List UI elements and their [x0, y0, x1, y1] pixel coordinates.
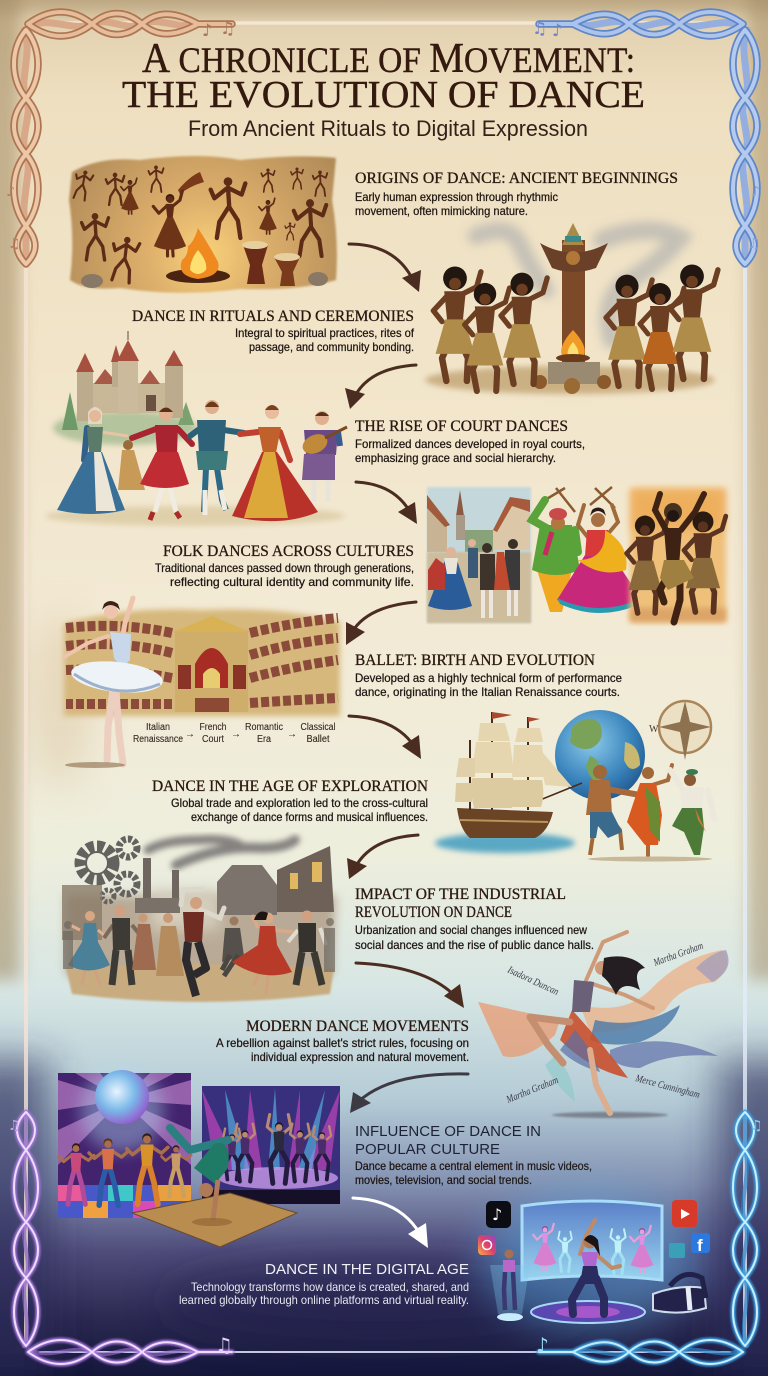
heading: popular culture: Dance became a central element in music videos, — [355, 1159, 592, 1173]
icon: vr headset — [653, 1274, 706, 1313]
bottom-left braid — [14, 1112, 232, 1364]
arrow 3 — [356, 482, 417, 524]
woman in red — [232, 912, 294, 995]
heading: court: Formalized dances developed in royal courts, — [355, 437, 585, 451]
man with waistcoat — [104, 906, 140, 985]
heading: rituals: DANCE IN RITUALS AND CEREMONIES — [132, 308, 414, 325]
holographic platform — [531, 1301, 645, 1323]
handwritten names — [504, 941, 705, 1106]
campfire — [166, 228, 230, 283]
timeline: → — [287, 729, 297, 740]
smoke — [476, 230, 680, 340]
background silhouettes — [63, 918, 335, 972]
arrow 1 — [349, 244, 421, 292]
heading: modern: individual expression and natural movement. — [251, 1050, 469, 1064]
dancer: woman in orange sari — [627, 765, 672, 858]
timeline: French — [200, 722, 226, 733]
city buildings — [62, 846, 334, 940]
disco floor — [58, 1185, 191, 1218]
arrow 6 — [347, 835, 418, 879]
timeline — [133, 722, 336, 745]
heading: popular culture: POPULAR CULTURE — [355, 1141, 500, 1158]
illustration: castle and court dancers — [45, 331, 347, 526]
dancer figure — [530, 932, 653, 1113]
icon: tiktok — [486, 1201, 511, 1228]
handwritten names: Martha Graham — [652, 941, 705, 969]
heading: folk: reflecting cultural identity and community life. — [170, 575, 414, 589]
illustration: ritual dance — [425, 223, 718, 394]
couples — [63, 889, 335, 996]
women in background — [132, 913, 184, 976]
compass: W — [649, 724, 659, 735]
heading: digital age: Technology transforms how dance is created, shared, and — [191, 1280, 469, 1294]
icon: facebook: f — [697, 1236, 703, 1255]
globe — [555, 710, 645, 800]
timeline: Romantic — [245, 722, 283, 733]
music notes: ♫ — [220, 19, 235, 39]
icon: instagram — [478, 1235, 496, 1255]
small hologram — [490, 1250, 530, 1321]
small background figure — [118, 440, 145, 490]
heading: exploration: Global trade and exploration led to the cross-cultural — [171, 796, 428, 810]
gown dancer red and gold — [232, 405, 318, 521]
dancer: man in green trousers — [670, 769, 714, 855]
music notes: ♫ — [8, 1118, 21, 1134]
heading: rituals — [132, 308, 415, 354]
breakdancer — [170, 1128, 232, 1226]
icon: tiktok: ♪ — [492, 1205, 502, 1224]
heading: digital age — [179, 1261, 469, 1307]
breakdance floor — [132, 1193, 297, 1247]
rocks — [81, 272, 328, 288]
panel: tribal dancers — [627, 488, 726, 622]
dandiya sticks — [540, 487, 615, 512]
gown dancer blue — [57, 407, 128, 514]
dance floor — [66, 964, 334, 1002]
heading: origins: Early human expression through rhythmic — [355, 190, 558, 204]
heading: origins: ORIGINS OF DANCE: ANCIENT BEGINNINGS — [355, 170, 678, 187]
arrow 2 — [345, 365, 416, 409]
music notes: ♪ — [536, 1333, 549, 1357]
totem pole — [533, 223, 611, 394]
bottom-right braid — [539, 1112, 757, 1364]
dancer: man in blue breeches — [586, 765, 640, 855]
music notes: ♪ — [751, 184, 760, 200]
illustration: industrial revolution — [62, 839, 336, 1002]
flowing fabric — [478, 950, 729, 1102]
heading: modern: A rebellion against ballet's strict rules, focusing on — [216, 1036, 469, 1050]
illustration: cave painting — [69, 156, 337, 293]
heading: folk — [155, 543, 414, 589]
heading: origins: movement, often mimicking nature. — [355, 204, 528, 218]
central man — [181, 889, 224, 996]
man on right — [288, 910, 326, 985]
heading: popular culture: INFLUENCE OF DANCE IN — [355, 1123, 541, 1140]
timeline: Renaissance — [133, 734, 183, 745]
music notes: ♫ — [748, 236, 761, 252]
panel: european village — [427, 487, 531, 623]
dancer red — [132, 407, 192, 520]
heading: folk: Traditional dances passed down through generations, — [155, 561, 414, 575]
music notes: ♫ — [532, 19, 547, 39]
hill and trees — [53, 392, 197, 445]
heading: industrial: REVOLUTION ON DANCE — [355, 904, 512, 921]
male dancer — [532, 500, 580, 612]
icon: shared video tile — [669, 1243, 685, 1258]
heading: court — [355, 418, 585, 465]
title — [122, 36, 645, 116]
drums — [242, 241, 300, 286]
timeline: Italian — [146, 722, 170, 733]
subtitle: From Ancient Rituals to Digital Expression — [188, 116, 588, 141]
music notes: ♪ — [6, 184, 15, 200]
cave figures — [71, 166, 327, 284]
heading: ballet: dance, originating in the Italian Renaissance courts. — [355, 685, 620, 699]
sea — [435, 833, 575, 853]
panel: disco — [58, 1068, 191, 1218]
heading: digital age: DANCE IN THE DIGITAL AGE — [265, 1261, 469, 1278]
heading: digital age: learned globally through online platforms and virtual reality. — [179, 1293, 469, 1307]
compass — [649, 701, 711, 760]
icon: youtube — [672, 1200, 697, 1227]
lute player — [299, 411, 347, 502]
heading: rituals: Integral to spiritual practices, rites of — [235, 326, 415, 340]
heading: exploration — [152, 778, 428, 824]
music notes: ♫ — [8, 236, 21, 252]
heading: industrial: IMPACT OF THE INDUSTRIAL — [355, 886, 566, 903]
arrow 9 — [353, 1198, 428, 1248]
heading: popular culture: movies, television, and social trends. — [355, 1173, 532, 1187]
title: A CHRONICLE OF MOVEMENT: — [142, 36, 635, 82]
timeline: Era — [257, 734, 271, 745]
heading: modern — [216, 1018, 469, 1064]
heading: origins — [355, 170, 678, 218]
ballerina — [64, 598, 164, 768]
music notes: ♫ — [215, 1333, 233, 1357]
woman in blue — [68, 911, 110, 985]
top-right braid — [539, 12, 757, 264]
factory — [135, 858, 277, 915]
icon: facebook — [691, 1233, 710, 1255]
timeline: Ballet — [306, 734, 330, 745]
heading: exploration: exchange of dance forms and musical influences. — [191, 810, 428, 824]
panel: south asian dancers — [532, 487, 642, 613]
heading: court: emphasizing grace and social hierarchy. — [355, 451, 556, 465]
heading: ballet — [355, 652, 622, 699]
handwritten names: Martha Graham — [504, 1075, 560, 1106]
heading: exploration: DANCE IN THE AGE OF EXPLORATION — [152, 778, 428, 795]
title: THE EVOLUTION OF DANCE — [122, 74, 645, 116]
timeline: → — [185, 729, 195, 740]
music notes: ♪ — [202, 21, 213, 41]
main dancer — [572, 1220, 620, 1314]
gears — [80, 839, 137, 902]
heading: rituals: passage, and community bonding. — [249, 340, 414, 354]
heading: ballet: Developed as a highly technical form of performance — [355, 671, 622, 685]
man in back — [222, 916, 244, 976]
illustration: ballet theatre — [64, 598, 340, 768]
illustration: digital age — [478, 1190, 710, 1330]
arrow 7 — [356, 963, 464, 1008]
opera house — [64, 609, 340, 716]
heading: modern: MODERN DANCE MOVEMENTS — [246, 1018, 469, 1035]
sailing ship — [455, 712, 582, 838]
timeline: Classical — [300, 722, 336, 733]
heading: ballet: BALLET: BIRTH AND EVOLUTION — [355, 652, 595, 669]
dancer blue — [190, 400, 244, 515]
heading: industrial: Urbanization and social changes influenced new — [355, 923, 587, 937]
arrow 5 — [349, 716, 421, 759]
handwritten names: Isadora Duncan — [505, 964, 560, 998]
music notes: ♫ — [750, 1118, 763, 1134]
heading: industrial — [355, 886, 594, 952]
ritual dancers — [433, 264, 718, 391]
village dancers — [428, 539, 520, 618]
timeline: → — [231, 729, 241, 740]
heading: folk: FOLK DANCES ACROSS CULTURES — [163, 543, 414, 560]
illustration: popular culture — [58, 1068, 340, 1247]
music notes: ♪ — [552, 21, 563, 41]
heading: popular culture — [355, 1123, 592, 1187]
curved screen — [522, 1201, 662, 1280]
female dancer — [557, 505, 642, 613]
illustration: modern dancer — [478, 932, 729, 1118]
heading: industrial: social dances and the rise of public dance halls. — [355, 938, 594, 952]
castle — [76, 331, 183, 421]
timeline: Court — [202, 734, 224, 745]
illustration: folk dances — [427, 487, 726, 623]
smoke — [148, 840, 295, 865]
handwritten names: Merce Cunningham — [633, 1073, 701, 1101]
panel: concert stage — [202, 1086, 340, 1204]
arrow 8 — [350, 1074, 468, 1113]
heading: court: THE RISE OF COURT DANCES — [355, 418, 568, 435]
tribal figures — [627, 511, 726, 613]
illustration: exploration — [435, 701, 714, 862]
arrow 4 — [346, 602, 416, 645]
top-left braid — [14, 12, 232, 264]
